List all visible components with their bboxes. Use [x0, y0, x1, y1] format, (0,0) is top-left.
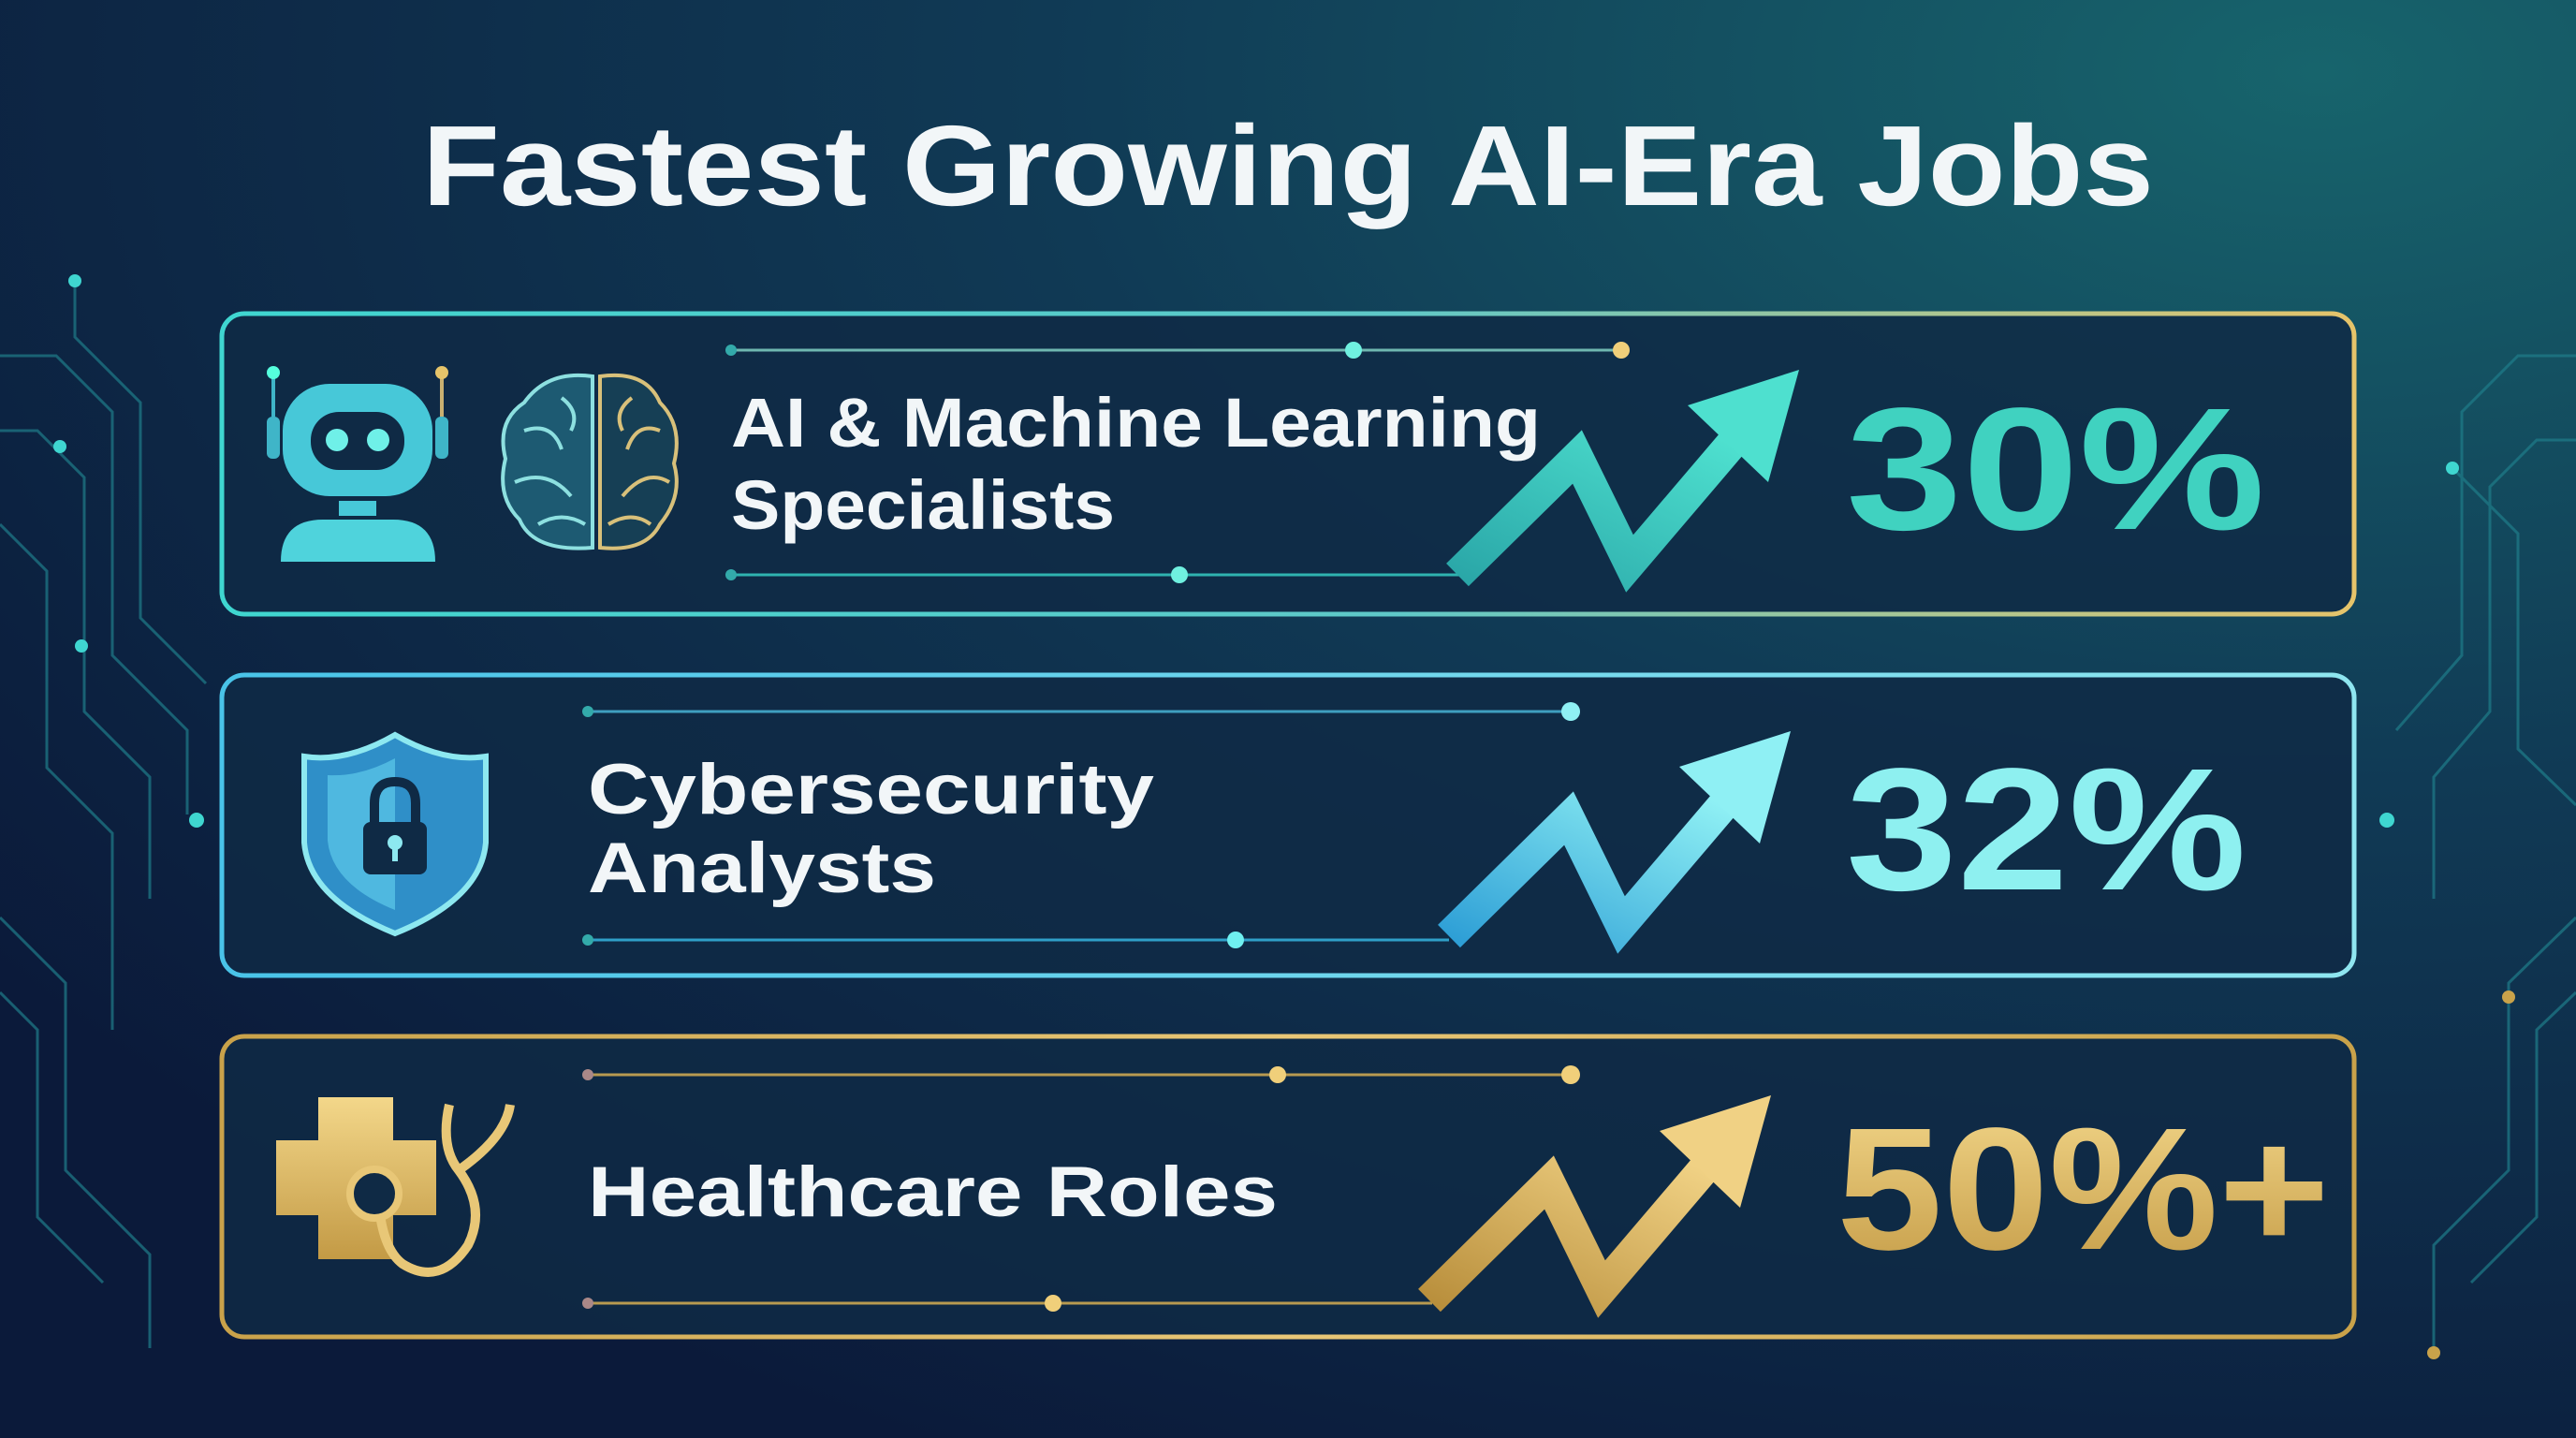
value: 50%+: 50%+ [1837, 1093, 2330, 1286]
icon: brain [503, 375, 677, 549]
panel: Cybersecurity Analysts: Analysts [588, 829, 936, 908]
text: AI & Machine Learning Specialists: AI & Machine Learning [731, 384, 1541, 462]
text: Cybersecurity Analysts: Cybersecurity [588, 750, 1154, 829]
value: 30%: 30% [1846, 373, 2265, 566]
icon: robot [267, 366, 448, 562]
icon: medical cross with stethoscope [276, 1097, 510, 1272]
panel: AI & Machine Learning [222, 314, 2354, 614]
arrow: growth [1429, 1095, 1771, 1300]
arrow: growth [1449, 731, 1791, 936]
title: Fastest Growing AI-Era Jobs [422, 102, 2154, 229]
panel: AI & Machine Learning: Specialists [731, 466, 1115, 544]
icon: shield with lock [304, 735, 486, 933]
text: Healthcare Roles: Healthcare Roles [588, 1152, 1278, 1232]
panel: Cybersecurity Analysts [222, 675, 2354, 976]
arrow: growth [1457, 370, 1799, 575]
value: 32%: 32% [1846, 733, 2247, 927]
panel: Healthcare Roles [222, 1036, 2354, 1337]
